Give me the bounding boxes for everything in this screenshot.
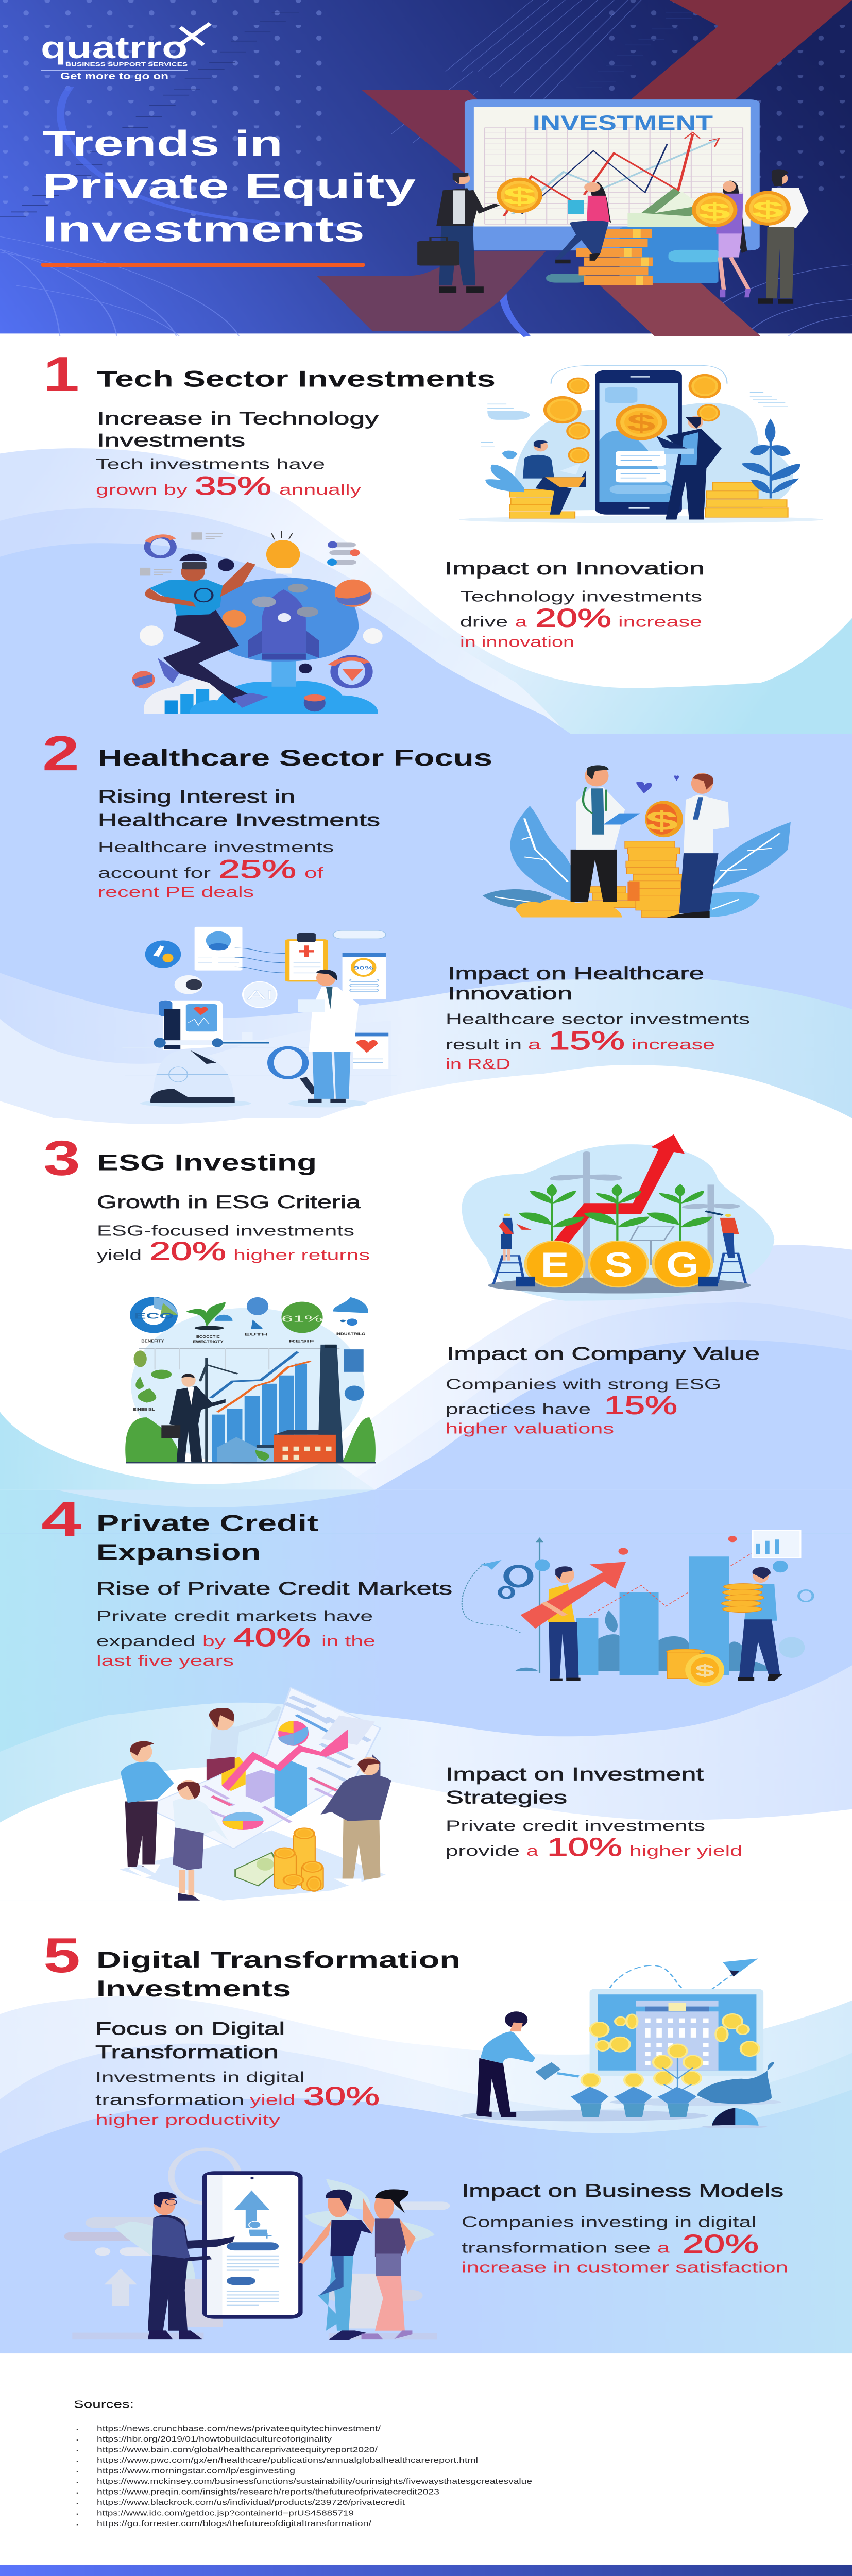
logo: BUSINESS SUPPORT SERVICES (65, 61, 188, 67)
illustration: medical robot and doctor (122, 927, 397, 1107)
panel: hero banner (0, 0, 852, 336)
text block: impact on company value (446, 1344, 760, 1437)
heading: Investments (96, 1976, 291, 2002)
text block: impact on innovation: increase (618, 614, 702, 630)
text block: impact on investment strategies: 10% (547, 1833, 622, 1861)
panel: section 1 tech sector investments (43, 347, 823, 714)
man with coin: $ (752, 197, 784, 223)
text block: impact on business models: a (657, 2240, 670, 2256)
text block: growth in ESG criteria: higher returns (233, 1247, 370, 1263)
illustration: phone with people (64, 2149, 450, 2331)
text block: rising interest: of (304, 865, 324, 882)
heading: Tech Sector Investments (97, 366, 496, 392)
heading: ESG Investing (97, 1150, 317, 1176)
woman with coin: $ (698, 198, 730, 224)
panel: section 3 ESG investing (43, 1130, 774, 1464)
text block: rise of private credit markets: in the (321, 1633, 376, 1650)
text block: impact on investment strategies: higher yield (629, 1842, 742, 1859)
title: Investments (42, 209, 365, 249)
text block: impact on healthcare innovation: Healthcare sector investments (446, 1011, 750, 1028)
text block: rise of private credit markets: last five years (96, 1653, 234, 1669)
seated woman with tablet (555, 182, 611, 263)
text block: growth in ESG criteria: yield (97, 1247, 142, 1263)
text block: impact on business models: Impact on Business Models (462, 2180, 783, 2201)
list of source links: https://www.idc.com/getdoc.jsp?containerId=prUS45885719 (97, 2509, 354, 2517)
text block: impact on business models: Companies investing in digital (462, 2214, 756, 2230)
illustration: phone with coins and investors: $ (627, 410, 656, 436)
section number 3: 3 (43, 1130, 80, 1185)
coin stacks and cash (235, 1827, 323, 1892)
text block: impact on company value: Impact on Company Value (447, 1344, 760, 1364)
text block: impact on healthcare innovation: in R&D (446, 1056, 510, 1073)
text block: rising interest (98, 787, 380, 901)
man in glasses (148, 2192, 235, 2331)
section number 4: 4 (41, 1492, 81, 1547)
woman with coin (692, 181, 751, 297)
text block: impact on company value: higher valuations (446, 1420, 614, 1437)
list of source links (77, 2424, 532, 2528)
text block: increase in technology: grown by (96, 481, 188, 498)
heading: Digital Transformation (96, 1947, 461, 1973)
illustration: doctors with coin stack (483, 765, 791, 918)
logo (41, 24, 210, 81)
heading: Expansion (96, 1540, 261, 1565)
illustration: ESG growth chart with businessman: EINEBISL (133, 1408, 155, 1411)
text block: impact on business models (462, 2180, 788, 2276)
logo: quatrro (41, 30, 188, 65)
text block: increase in technology: Tech investments have (96, 456, 325, 473)
text block: impact on investment strategies: Impact on Investment (446, 1764, 704, 1784)
text block: increase in technology: Investments (97, 430, 245, 450)
text block: growth in ESG criteria (97, 1192, 370, 1265)
man right (320, 1754, 391, 1887)
text block: impact on business models: 20% (683, 2230, 759, 2258)
text block: impact on innovation: Technology investments (460, 588, 702, 605)
text block: increase in technology: 35% (195, 472, 271, 500)
text block: impact on investment strategies: provide (446, 1842, 520, 1859)
sources heading: Sources: (74, 2399, 134, 2411)
text block: focus on digital transformation: Focus on Digital (95, 2019, 285, 2039)
standing man (656, 416, 722, 519)
text block: focus on digital transformation: Transformation (95, 2042, 279, 2062)
text block: impact on healthcare innovation: Impact on Healthcare (448, 963, 704, 984)
left doctor (571, 765, 640, 902)
person carrying coins (722, 1567, 782, 1681)
panel: section 2 healthcare sector focus (42, 726, 791, 1107)
man left (121, 1741, 174, 1877)
woman front (173, 1780, 228, 1901)
text block: rise of private credit markets: Rise of Private Credit Markets (96, 1578, 452, 1599)
heading (96, 1947, 461, 2002)
text block: impact on company value: Companies with strong ESG (446, 1376, 721, 1393)
text block: rise of private credit markets: by (202, 1633, 226, 1650)
text block: growth in ESG criteria: Growth in ESG Criteria (97, 1192, 361, 1212)
text block: rise of private credit markets (96, 1578, 452, 1669)
illustration: growth bars with arrow and coins: $ (695, 1662, 714, 1680)
illustration: team with report and coins (120, 1687, 391, 1901)
text block: impact on company value: practices have (446, 1401, 591, 1417)
man with coin (745, 170, 809, 304)
illustration: ESG coins with plants and arrow: G (666, 1245, 699, 1284)
robot (150, 975, 269, 1103)
logo: Get more to go on (60, 71, 168, 81)
list of source links: https://hbr.org/2019/01/howtobuildacultureoforiginality (97, 2434, 332, 2443)
heading: Private Credit (96, 1511, 318, 1536)
heading: Healthcare Sector Focus (98, 745, 492, 771)
illustration: ESG growth chart with businessman: RESIF (289, 1339, 314, 1343)
illustration: ESG growth chart with businessman: ECO (134, 1311, 174, 1320)
illustration: ESG growth chart with businessman: INDUSTRILO (335, 1332, 365, 1336)
list of source links: https://go.forrester.com/blogs/thefutureofdigitaltransformation/ (97, 2519, 371, 2528)
list of source links: https://www.preqin.com/insights/research/reports/thefutureofprivatecredit2023 (97, 2487, 439, 2496)
text block: focus on digital transformation: 30% (303, 2082, 380, 2111)
man with briefcase (417, 173, 542, 293)
text block: impact on healthcare innovation: result in (446, 1036, 522, 1053)
illustration: growth bars with arrow and coins (462, 1530, 813, 1686)
text block: impact on healthcare innovation (446, 963, 750, 1073)
list of source links: https://www.blackrock.com/us/individual/products/239726/privatecredit (97, 2498, 405, 2506)
text block: rising interest: Healthcare Investments (98, 810, 380, 830)
text block: impact on innovation: in innovation (460, 634, 574, 650)
text block: rising interest: recent PE deals (98, 884, 254, 901)
text block: impact on innovation: Impact on Innovation (445, 558, 705, 579)
text block: growth in ESG criteria: 20% (149, 1237, 226, 1265)
list of source links: https://www.mckinsey.com/businessfunctions/sustainability/ourinsights/fivewaysthatesgcreatesvalue (97, 2477, 532, 2485)
text block: impact on healthcare innovation: Innovation (448, 983, 572, 1004)
list of source links: https://news.crunchbase.com/news/privateequitytechinvestment/ (97, 2424, 381, 2433)
illustration: investment monitor with investors: INVESTMENT (533, 111, 713, 134)
text block: increase in technology (96, 409, 379, 500)
text block: impact on innovation: drive (460, 614, 508, 630)
text block: focus on digital transformation (95, 2019, 380, 2128)
text block: impact on innovation: 20% (535, 604, 611, 633)
illustration: investment monitor with investors (417, 99, 809, 304)
text block: rise of private credit markets: Private credit markets have (96, 1608, 373, 1624)
illustration: ESG growth chart with businessman: EWECTRIOTY (193, 1340, 224, 1344)
illustration: man watering coin plants (461, 1958, 781, 2128)
text block: focus on digital transformation: Investments in digital (95, 2069, 304, 2086)
title: Private Equity (42, 166, 416, 206)
illustration: rocket and innovation (132, 531, 384, 714)
text block: focus on digital transformation: yield (250, 2092, 295, 2108)
text block: impact on business models: transformation see (462, 2240, 651, 2256)
person in yellow with arrow (521, 1562, 626, 1681)
illustration: medical robot and doctor: AI (247, 988, 274, 1003)
footer band (0, 2565, 852, 2576)
section number 5: 5 (43, 1928, 80, 1983)
text block: impact on healthcare innovation: 15% (549, 1027, 625, 1055)
list of source links: https://www.bain.com/global/healthcareprivateequityreport2020/ (97, 2445, 378, 2454)
right doctor (666, 773, 729, 918)
illustration: ESG growth chart with businessman (125, 1297, 376, 1464)
text block: rising interest: account for (98, 865, 211, 882)
text block: impact on investment strategies (446, 1764, 742, 1861)
person with VR headset (145, 554, 269, 708)
text block: impact on company value: 15% (604, 1391, 677, 1419)
man with briefcase: $ (503, 183, 536, 210)
text block: impact on investment strategies: Strategies (446, 1787, 567, 1807)
text block: increase in technology: Increase in Technology (97, 409, 379, 429)
text block: growth in ESG criteria: ESG-focused investments (97, 1223, 354, 1239)
illustration: ESG coins with plants and arrow: S (604, 1245, 633, 1284)
heading (96, 1511, 318, 1565)
text block: impact on business models: increase in customer satisfaction (462, 2259, 788, 2276)
two people (299, 2189, 416, 2331)
list of source links: https://www.morningstar.com/lp/esginvesting (97, 2466, 295, 2475)
text block: rising interest: Rising Interest in (98, 787, 295, 807)
text block: impact on innovation (445, 558, 705, 650)
illustration: ESG growth chart with businessman: BENEFITY (141, 1338, 164, 1343)
illustration: ESG coins with plants and arrow: E (541, 1245, 569, 1284)
text block: focus on digital transformation: higher productivity (95, 2112, 280, 2128)
doctor (270, 970, 359, 1103)
illustration: doctors with coin stack: $ (645, 806, 678, 836)
section number 1: 1 (43, 347, 79, 401)
panel: section 5 digital transformation investments (43, 1928, 788, 2340)
illustration: medical robot and doctor: 90% (354, 966, 373, 971)
title: Trends in (42, 124, 283, 163)
businessman (161, 1374, 226, 1462)
illustration: shoes and floor shadows (72, 2330, 437, 2340)
illustration: ESG growth chart with businessman: EUTH (244, 1332, 268, 1336)
panel: section 4 private credit expansion (41, 1492, 813, 1901)
text block: increase in technology: annually (279, 481, 361, 498)
man with watering can (476, 2011, 578, 2117)
text block: impact on innovation: a (515, 614, 527, 630)
text block: impact on healthcare innovation: a (528, 1036, 541, 1053)
text block: rising interest: 25% (218, 855, 296, 884)
text block: impact on investment strategies: Private credit investments (446, 1818, 705, 1834)
panel: sources (74, 2399, 532, 2528)
illustration: ESG coins with plants and arrow (462, 1134, 774, 1301)
illustration: ESG growth chart with businessman: ECOCCTIC (196, 1334, 220, 1339)
illustration: phone with coins and investors (459, 365, 823, 523)
seated man (523, 440, 586, 515)
text block: focus on digital transformation: transformation (95, 2092, 244, 2108)
text block: rise of private credit markets: 40% (233, 1623, 311, 1652)
section number 2: 2 (42, 726, 79, 781)
text block: rising interest: Healthcare investments (98, 839, 334, 856)
title (41, 124, 416, 267)
plants (742, 418, 800, 494)
woman top (207, 1706, 281, 1781)
illustration: ESG growth chart with businessman: 61% (281, 1313, 323, 1324)
text block: impact on healthcare innovation: increase (632, 1036, 715, 1053)
text block: rise of private credit markets: expanded (96, 1633, 196, 1650)
list of source links: https://www.pwc.com/gx/en/healthcare/publications/annualglobalhealthcarereport.html (97, 2455, 478, 2464)
text block: impact on investment strategies: a (526, 1842, 538, 1859)
